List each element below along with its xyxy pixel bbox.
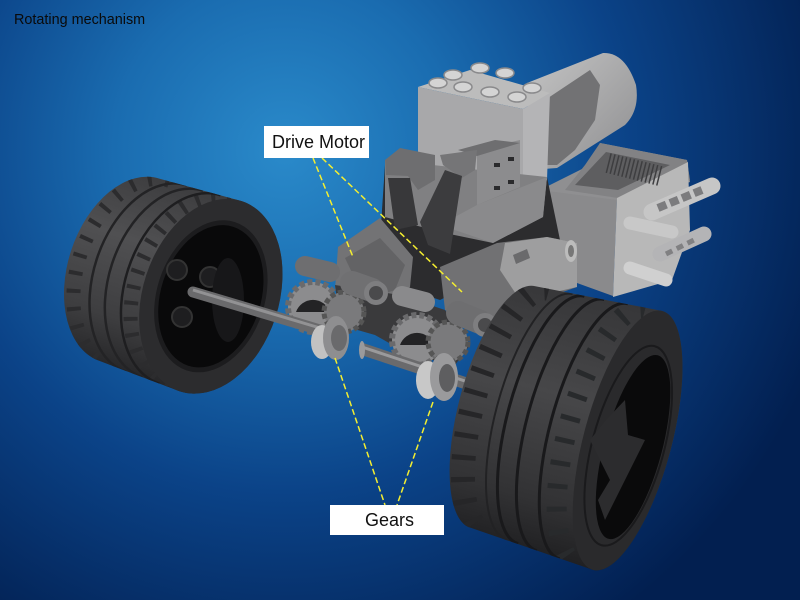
right rim xyxy=(567,337,690,555)
motor front pins xyxy=(305,266,497,337)
right tyre tread xyxy=(426,266,705,581)
gears xyxy=(288,282,468,365)
left connector xyxy=(385,148,435,190)
right connector block xyxy=(440,140,520,205)
left wheel xyxy=(64,176,282,394)
right wheel xyxy=(450,286,682,570)
upper motor cylinder xyxy=(527,53,637,170)
left tyre sidewall xyxy=(115,180,306,412)
axles xyxy=(193,290,480,388)
label: Drive Motor: Drive Motor xyxy=(272,132,365,152)
leader lines: drive motor xyxy=(313,158,462,292)
motor brick with studs xyxy=(418,63,550,192)
left rim xyxy=(135,205,286,387)
lower brick stack xyxy=(385,160,547,243)
label: Gears xyxy=(330,505,444,535)
left tyre tread xyxy=(40,156,306,412)
ribbon cables xyxy=(388,170,462,254)
right tyre sidewall xyxy=(550,300,705,581)
gearbox dark backing xyxy=(335,285,470,365)
bushings xyxy=(311,316,458,401)
left hub detail xyxy=(167,258,244,342)
drive motors xyxy=(335,218,577,333)
title: Rotating mechanism xyxy=(14,12,145,28)
label: Drive Motor xyxy=(264,126,369,158)
leader lines: gears xyxy=(335,358,433,505)
right hub spokes xyxy=(590,400,645,520)
dark machine base fill xyxy=(380,165,560,300)
label: Gears: Gears xyxy=(365,510,414,530)
power battery box xyxy=(540,143,712,297)
